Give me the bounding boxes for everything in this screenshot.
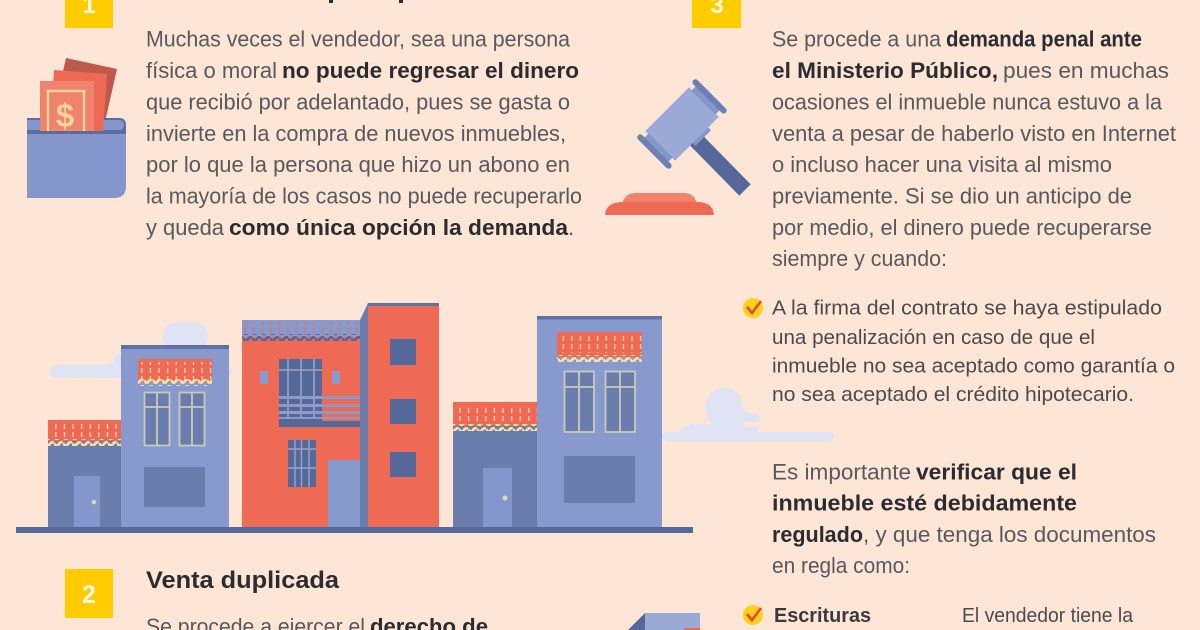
icon: wallet with money: $ bbox=[56, 97, 74, 134]
text block: verificar inmueble: inmueble esté debidamente bbox=[772, 490, 1077, 516]
illustration: street of houses bbox=[16, 303, 834, 533]
text block: section 3 body: venta a pesar de haberlo visto en Internet bbox=[772, 121, 1177, 146]
text block: section 3 body: siempre y cuando: bbox=[772, 246, 947, 271]
text block: section 1 body: no puede regresar el dinero bbox=[282, 58, 579, 83]
blue house bbox=[121, 345, 229, 527]
check icon bbox=[743, 605, 763, 625]
text block: section 3 body bbox=[772, 26, 1177, 271]
ground bbox=[16, 527, 693, 533]
text block: verificar inmueble: , y que tenga los documentos bbox=[863, 522, 1156, 547]
text block: section 2 body bbox=[146, 614, 488, 630]
text block: verificar inmueble: verificar que el bbox=[916, 460, 1077, 484]
number badge 1 bbox=[65, 0, 113, 28]
text block: section 1 body: como única opción la demanda bbox=[229, 215, 569, 240]
checklist item: penalización bbox=[772, 296, 1175, 406]
text block: verificar inmueble: Es importante bbox=[772, 460, 911, 484]
heading 1 descenders, cropped at top edge bbox=[329, 0, 403, 3]
text block: section 1 body: por lo que la persona que hizo un abono en bbox=[146, 152, 570, 177]
icon: cropped document at bottom edge bbox=[628, 613, 700, 630]
right short house bbox=[453, 402, 537, 527]
text block: verificar inmueble: regulado bbox=[772, 522, 863, 547]
text block: section 3 body: o incluso hacer una visita al mismo bbox=[772, 152, 1112, 177]
text block: verificar inmueble bbox=[772, 460, 1156, 578]
text block: section 1 body bbox=[146, 26, 582, 240]
red house bbox=[242, 320, 360, 527]
heading: venta duplicada: Venta duplicada bbox=[146, 567, 340, 594]
icon: wallet with money bbox=[27, 58, 126, 198]
text block: section 1 body: física o moral bbox=[146, 58, 277, 83]
checklist item: penalización: no sea aceptado el crédito hipotecario. bbox=[772, 383, 1134, 406]
text block: section 1 body: y queda bbox=[146, 215, 224, 240]
text block: section 3 body: previamente. Si se dio un anticipo de bbox=[772, 184, 1132, 208]
checklist item: penalización: una penalización en caso de que el bbox=[772, 326, 1095, 349]
text block: section 1 body: . bbox=[568, 215, 574, 240]
checklist item: penalización: inmueble no sea aceptado como garantía o bbox=[772, 354, 1175, 378]
clouds behind houses bbox=[50, 322, 834, 442]
text block: section 3 body: el Ministerio Público, bbox=[772, 58, 998, 83]
checklist item: escrituras: Escrituras bbox=[774, 604, 871, 627]
text: el vendedor: El vendedor tiene la bbox=[962, 604, 1134, 627]
text block: section 3 body: demanda penal ante bbox=[946, 26, 1142, 52]
red tower bbox=[360, 303, 439, 527]
text block: section 3 body: pues en muchas bbox=[1003, 58, 1169, 83]
number badge 3 bbox=[692, 0, 741, 28]
check icon bbox=[743, 298, 763, 318]
text block: section 3 body: Se procede a una bbox=[772, 26, 941, 52]
number badge 2: 2 bbox=[82, 581, 96, 609]
right blue house bbox=[537, 316, 662, 527]
text block: section 1 body: Muchas veces el vendedor, sea una persona bbox=[146, 26, 570, 52]
icon: gavel bbox=[605, 78, 745, 215]
text block: section 1 body: invierte en la compra de nuevos inmuebles, bbox=[146, 121, 566, 146]
text block: section 3 body: por medio, el dinero puede recuperarse bbox=[772, 215, 1152, 240]
text block: section 1 body: la mayoría de los casos no puede recuperarlo bbox=[146, 184, 582, 208]
left short house bbox=[48, 420, 121, 527]
text block: verificar inmueble: en regla como: bbox=[772, 553, 910, 578]
text block: section 1 body: que recibió por adelantado, pues se gasta o bbox=[146, 90, 570, 114]
text block: section 3 body: ocasiones el inmueble nunca estuvo a la bbox=[772, 90, 1162, 114]
checklist item: penalización: A la firma del contrato se haya estipulado bbox=[772, 296, 1162, 320]
number badge 2 bbox=[65, 569, 113, 618]
